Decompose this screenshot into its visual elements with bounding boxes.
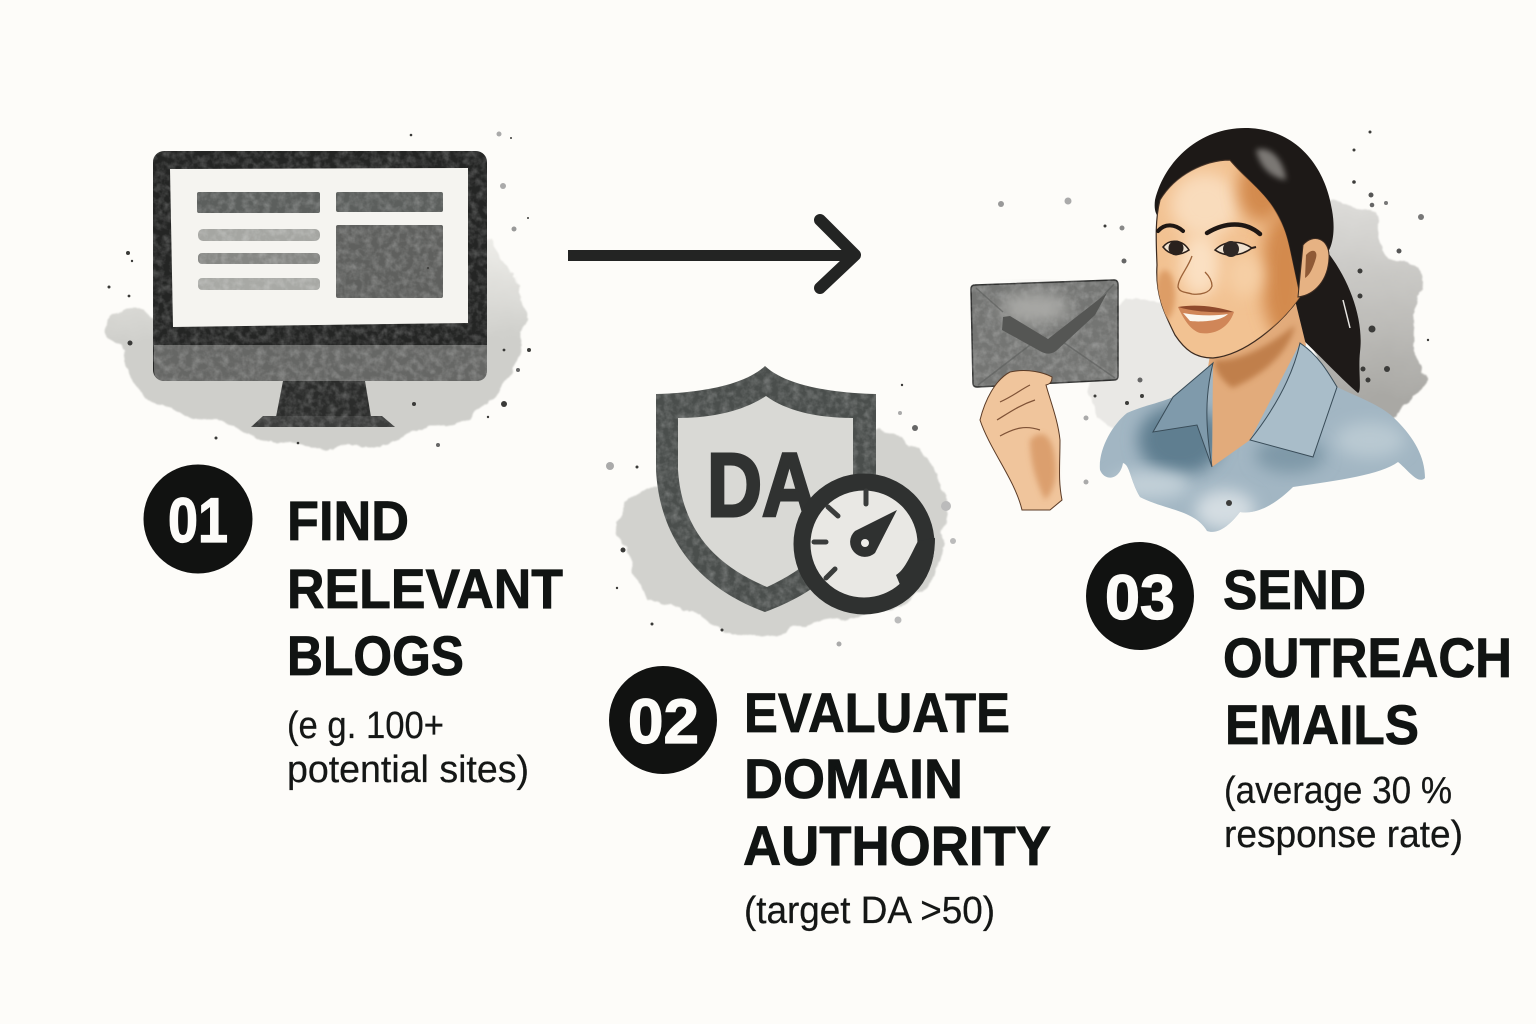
panel: step 3 send outreach emails	[971, 128, 1512, 856]
note: e.g. 100+ potential sites: (e g. 100+	[287, 705, 444, 747]
heading: send outreach emails	[1223, 558, 1512, 756]
face	[1156, 160, 1300, 358]
left collar	[1153, 363, 1213, 467]
monitor screen	[170, 168, 468, 327]
heading: find relevant blogs	[287, 489, 563, 687]
shield label DA: DA	[707, 436, 817, 536]
shield outer	[656, 366, 876, 612]
mouth	[1178, 306, 1234, 333]
envelope	[971, 280, 1118, 387]
infographic canvas	[104, 128, 1509, 932]
neck	[1205, 300, 1306, 472]
neck shadow	[1214, 325, 1295, 388]
heading: send outreach emails: SEND	[1223, 558, 1366, 621]
note: target DA above 50: (target DA >50)	[744, 890, 995, 932]
badge 03: 03	[1105, 563, 1175, 633]
heading: find relevant blogs: FIND	[287, 489, 409, 552]
badge 02: 02	[628, 687, 699, 757]
gauge dial	[802, 482, 935, 606]
ink speckles around woman	[998, 130, 1429, 506]
icon: desktop monitor with web page	[104, 151, 524, 449]
inner ear	[1305, 251, 1316, 278]
ear	[1298, 239, 1329, 297]
heading: send outreach emails: EMAILS	[1225, 693, 1419, 756]
heading: find relevant blogs: BLOGS	[287, 624, 464, 687]
ink wash behind monitor	[104, 240, 524, 449]
arrow: pointing right	[568, 220, 855, 288]
ink wash behind shield	[618, 432, 946, 638]
right collar	[1250, 343, 1337, 457]
heading: evaluate domain authority	[743, 681, 1051, 877]
hand holding envelope	[980, 371, 1062, 510]
heading: evaluate domain authority: AUTHORITY	[743, 814, 1051, 877]
monitor body	[153, 151, 487, 427]
envelope fold lines	[976, 284, 1115, 385]
ponytail highlight	[1343, 300, 1350, 328]
right eye	[1215, 241, 1256, 257]
ponytail	[1290, 245, 1361, 393]
hair highlight	[1256, 149, 1286, 180]
right eyebrow	[1207, 224, 1260, 234]
left eyebrow	[1158, 225, 1183, 231]
ink speckles around monitor	[108, 132, 531, 447]
panel: step 1 find relevant blogs	[104, 132, 563, 791]
face shading	[1156, 162, 1300, 336]
ink wash behind woman	[1091, 200, 1425, 440]
shirt	[1100, 343, 1425, 532]
nose	[1178, 256, 1212, 294]
shield inner	[678, 396, 853, 587]
badge 01	[144, 464, 252, 574]
note: e.g. 100+ potential sites: potential sites)	[287, 749, 529, 791]
screen content bars	[197, 192, 443, 298]
hair	[1155, 128, 1334, 262]
note: average 30 percent response rate	[1224, 770, 1463, 856]
note: e.g. 100+ potential sites	[287, 705, 529, 791]
panel: step 2 evaluate domain authority	[606, 366, 1051, 932]
badge 01: 01	[168, 486, 228, 556]
badge 02	[609, 666, 717, 774]
envelope flap	[1002, 293, 1107, 354]
heading: find relevant blogs: RELEVANT	[287, 557, 563, 620]
heading: evaluate domain authority: DOMAIN	[744, 747, 963, 810]
illustration: woman holding envelope	[971, 128, 1425, 532]
left eye	[1163, 240, 1189, 256]
note: average 30 percent response rate: (average 30 %	[1224, 770, 1452, 812]
ink speckles around shield	[606, 384, 956, 646]
icon: DA shield with gauge	[618, 366, 946, 638]
note: average 30 percent response rate: response rate)	[1224, 814, 1463, 856]
badge 03	[1086, 542, 1194, 650]
heading: send outreach emails: OUTREACH	[1223, 626, 1512, 689]
heading: evaluate domain authority: EVALUATE	[744, 681, 1010, 744]
